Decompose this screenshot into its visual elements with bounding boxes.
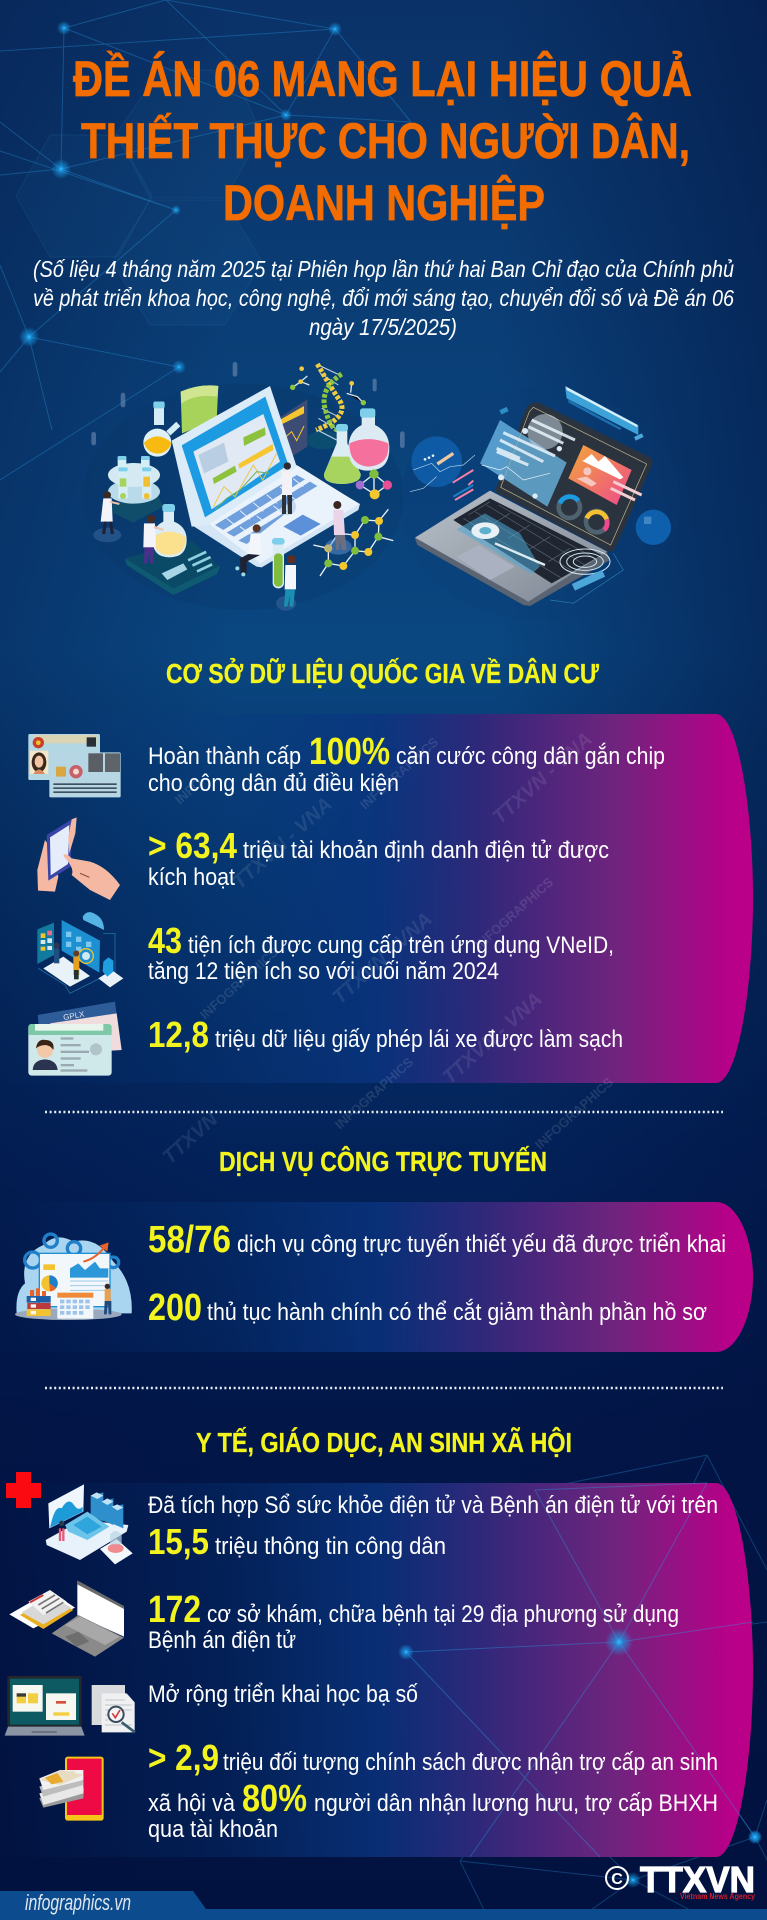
row: e-ID accounts: triệu tài khoản định danh điện tử được [243,837,609,864]
watermarks panel one: TTXVN - VNA [439,988,547,1089]
icon: app screens and shield [37,912,123,993]
panel: online public services: 58/76 [148,1219,231,1261]
orange card [568,445,642,505]
laptop body [172,386,360,567]
footer source: infographics.vn [25,1890,131,1915]
row: e-medical records: Bệnh án điện tử [148,1627,296,1654]
hexagon molecule [313,509,393,576]
test tube [272,538,285,588]
row: social security: người dân nhận lương hưu, trợ cấp BHXH [314,1790,718,1817]
row: health records [6,1472,718,1564]
heading: online public services: DỊCH VỤ CÔNG TRỰC TUYẾN [219,1145,547,1177]
watermarks panel one: INFO [172,775,205,807]
background watermarks between sections [159,1054,616,1169]
logo: TTXVN: TTXVN [640,1859,755,1900]
row: digital school records [5,1676,418,1736]
row: social security: qua tài khoản [148,1816,278,1843]
laptop lid [496,403,653,552]
icon: driving licence [28,1002,122,1076]
back chart panel [269,399,307,457]
watermarks panel one: INFOGRAPHICS [357,734,441,812]
floating top panel [499,386,644,441]
icon: health data platform [46,1484,133,1564]
heading: population database: CƠ SỞ DỮ LIỆU QUỐC GIA VỀ DÂN CƯ [166,657,600,689]
fingerprint device [550,549,623,603]
row: chip ID: Hoàn thành cấp [148,743,301,770]
panel: health education social security [0,1472,762,1857]
logo: TTXVN: C [611,1871,623,1888]
icon: red cross [6,1472,41,1508]
scientists [93,462,352,611]
title [73,51,692,231]
row: driving licences [28,1002,623,1076]
footer band [0,1890,767,1920]
icon: laptop and records [9,1580,124,1657]
illustration: data laptop [400,386,680,620]
background watermarks between sections: TTXVN [159,1108,222,1169]
donut rings [559,497,607,532]
glass panel [480,414,575,507]
beaker green [181,385,218,433]
row: social security: > 2,9 [148,1737,219,1778]
row: health records: triệu thông tin công dân [215,1533,446,1560]
row: digital school records: Mở rộng triển khai học bạ số [148,1681,418,1708]
icon: driving licence: GPLX [63,1009,86,1022]
panel: online public services: 200 [148,1287,202,1329]
dna helix [290,364,366,449]
row: social security: 80% [242,1778,307,1820]
row: e-medical records: 172 [148,1589,201,1631]
row: e-ID accounts: > 63,4 [148,825,237,866]
tube rack [108,456,163,523]
row: VNeID utilities [37,912,614,993]
row: e-medical records: cơ sở khám, chữa bệnh tại 29 địa phương sử dụng [207,1601,679,1628]
flask pink [348,408,389,471]
divider two [45,1387,723,1389]
background watermarks between sections: INFOGRAPHICS [332,1054,416,1132]
row: driving licences: triệu dữ liệu giấy phép lái xe được làm sạch [215,1026,623,1053]
illustration: science laptop [83,362,405,611]
icon: phone and cash [39,1758,103,1820]
logo: TTXVN: Vietnam News Agency [680,1892,755,1901]
icon: services dashboard [15,1234,132,1320]
watermarks panel one: TTXVN - VNA [229,793,337,894]
network overlay on panel [398,1483,762,1857]
panel: online public services: thủ tục hành chính có thể cắt giảm thành phần hồ sơ [207,1299,707,1326]
row: e-ID accounts: kích hoạt [148,864,235,891]
row: health records: 15,5 [148,1521,209,1562]
panel: online public services [0,1202,753,1352]
watermarks panel one: TTXVN - VNA [329,908,437,1009]
molecule small [356,469,392,499]
watermarks panel one [172,728,597,1089]
row: driving licences: 12,8 [148,1014,209,1055]
heading: health education social security: Y TẾ, GIÁO DỤC, AN SINH XÃ HỘI [196,1426,572,1458]
divider one [45,1111,723,1113]
row: social security [39,1737,718,1843]
row: VNeID utilities: 43 [148,920,182,961]
background network top left [0,0,411,480]
row: e-medical records [9,1580,679,1657]
row: chip ID: căn cước công dân gắn chip [396,743,665,770]
flask yellow [143,402,178,457]
subtitle [33,256,734,340]
icon: laptop and documents [5,1676,135,1736]
panel: population database [0,714,753,1089]
title: DOANH NGHIỆP [223,175,545,231]
network glow nodes top left [19,21,342,374]
floating circles [411,436,671,545]
row: chip ID: 100% [309,731,390,773]
row: VNeID utilities: tiện ích được cung cấp trên ứng dụng VNeID, [188,932,614,959]
row: VNeID utilities: tăng 12 tiện ích so với cuối năm 2024 [148,958,499,985]
scale and yellow flask [125,504,220,595]
watermarks panel one: INFOGRAPHICS [472,874,556,952]
icon: hand with phone [37,817,120,900]
left circle content [410,453,475,500]
icon: ID cards [28,734,121,797]
background watermarks between sections: INFOGRAPHICS [532,1074,616,1152]
row: chip ID [28,731,665,797]
watermarks panel one: TTXVN - VNA [489,728,597,829]
row: social security: xã hội và [148,1790,236,1817]
subtitle: ngày 17/5/2025) [309,314,457,340]
laptop base [415,491,610,606]
row: chip ID: cho công dân đủ điều kiện [148,770,399,797]
watermarks panel one: INFOGRAPHICS [197,944,281,1022]
row: e-ID accounts [37,817,609,900]
background network bottom right [399,1455,767,1920]
flask green [324,424,361,484]
background hexagons top left [16,70,262,325]
